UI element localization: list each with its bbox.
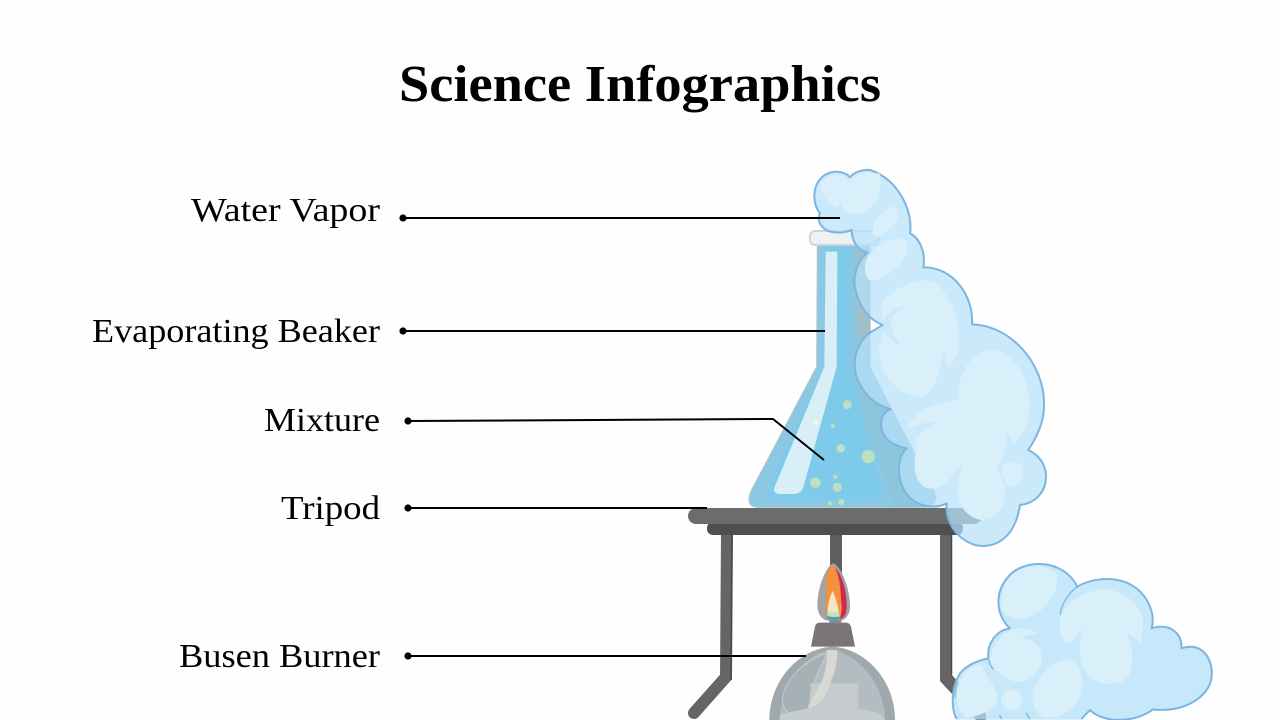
label: water vapor: Water Vapor <box>191 192 381 229</box>
label: mixture: Mixture <box>264 402 380 439</box>
tripod stand <box>688 508 986 720</box>
cloud highlights <box>820 173 1029 520</box>
burner flask <box>769 623 895 720</box>
beaker rim <box>810 231 879 245</box>
label: tripod <box>281 490 707 527</box>
small cloud highlights <box>956 566 1143 718</box>
label: bunsen burner: Busen Burner <box>179 638 381 675</box>
water vapor cloud <box>814 170 1046 546</box>
label: water vapor <box>191 192 840 229</box>
glass highlight <box>774 252 837 494</box>
evaporating beaker <box>749 231 936 507</box>
flame <box>817 563 850 623</box>
small vapor cloud <box>953 564 1212 720</box>
label: tripod: Tripod <box>281 490 380 527</box>
small cloud inner outlines <box>988 587 1077 719</box>
small cloud outline <box>953 564 1212 720</box>
label: evaporating beaker: Evaporating Beaker <box>92 313 381 350</box>
label: bunsen burner <box>179 638 806 675</box>
burner cap <box>811 623 855 647</box>
label: mixture <box>264 402 824 460</box>
mixture bubbles <box>810 400 875 506</box>
mixture liquid <box>768 245 882 500</box>
label: evaporating beaker <box>92 313 825 350</box>
title: Science Infographics <box>399 56 881 113</box>
